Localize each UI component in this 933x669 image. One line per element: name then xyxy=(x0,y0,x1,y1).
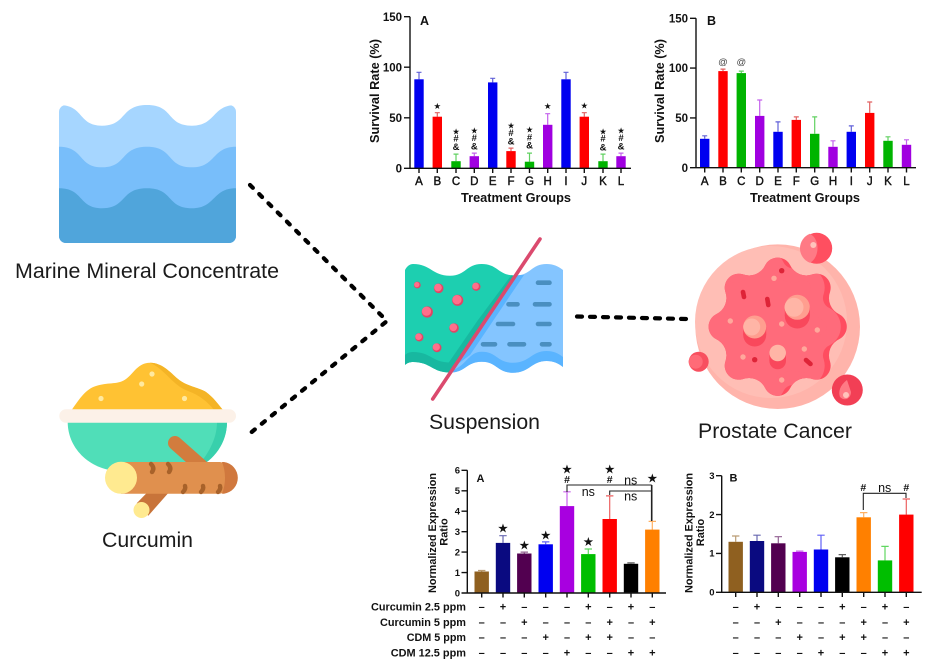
axis titles: Treatment Groups xyxy=(750,191,860,205)
significance marks xyxy=(433,102,625,154)
significance marks: # xyxy=(472,133,478,144)
icon: prostate cancer cell xyxy=(689,233,863,409)
axis title: Normalized Expression xyxy=(427,473,439,593)
significance marks: & xyxy=(453,142,460,153)
label: Suspension: Suspension xyxy=(429,411,540,434)
significance marks: @ xyxy=(718,57,728,68)
axis titles xyxy=(368,39,571,205)
significance marks: ns xyxy=(878,481,891,495)
treatment plus/minus grid: –+–––+–+– xyxy=(733,602,909,614)
chart: survival rate panel A xyxy=(368,12,631,205)
panel letter A: A xyxy=(420,14,429,28)
axis tick labels: 150 xyxy=(383,12,402,24)
significance marks: ★ xyxy=(583,534,594,549)
significance marks: ★ xyxy=(433,102,441,112)
treatment plus/minus grid: –+–––+–+– xyxy=(479,602,655,614)
significance marks xyxy=(860,481,909,495)
treatment plus/minus grid: –––+–++–– xyxy=(733,632,909,644)
bars xyxy=(414,72,626,168)
chart: expression panel A xyxy=(371,462,666,660)
axes xyxy=(690,18,916,172)
axis title xyxy=(684,473,707,593)
panel letter A: A xyxy=(476,473,484,485)
significance marks: # xyxy=(903,482,909,494)
significance marks xyxy=(497,462,658,552)
axis title: Ratio xyxy=(438,518,450,546)
significance marks: & xyxy=(526,141,533,152)
axis tick labels: 0 xyxy=(682,163,688,175)
significance marks: # xyxy=(527,132,533,143)
significance brackets xyxy=(567,485,652,495)
significance marks: ns xyxy=(624,490,637,504)
axis tick labels: 3 xyxy=(709,471,714,482)
icon: curcumin bowl and root xyxy=(59,363,238,518)
icon: sea water waves xyxy=(59,105,236,243)
label: Curcumin: Curcumin xyxy=(102,529,193,552)
axis tick labels: 50 xyxy=(675,113,688,125)
axis tick labels: 0 xyxy=(396,163,402,175)
axis tick labels xyxy=(709,471,715,599)
chart: expression panel B xyxy=(684,471,922,660)
axis tick labels: 100 xyxy=(669,63,688,75)
axis tick labels: 100 xyxy=(383,62,402,74)
treatment plus/minus grid: ––––+––++ xyxy=(479,648,656,660)
significance marks: ★ xyxy=(470,126,478,136)
bars xyxy=(474,492,660,593)
icon: suspension split panel xyxy=(395,239,570,399)
treatment row labels: CDM 12.5 ppm xyxy=(391,648,466,660)
panel letter B: B xyxy=(730,472,738,484)
axis tick labels: 1 xyxy=(455,568,461,579)
significance marks: # xyxy=(860,482,866,494)
significance marks: # xyxy=(453,134,459,145)
significance marks: ★ xyxy=(647,470,658,486)
significance marks: & xyxy=(508,136,515,147)
bars xyxy=(728,499,914,592)
significance marks: ★ xyxy=(519,538,530,552)
axis tick labels: 4 xyxy=(455,506,461,518)
significance marks: ★ xyxy=(540,528,551,542)
treatment row labels: CDM 5 ppm xyxy=(407,632,466,644)
axis tick labels: 2 xyxy=(709,510,714,521)
axis titles: Survival Rate (%) xyxy=(368,39,382,143)
treatment plus/minus grid xyxy=(479,602,656,660)
axes xyxy=(404,17,631,173)
axis tick labels: 0 xyxy=(709,588,714,599)
significance marks: & xyxy=(618,141,625,152)
axis tick labels xyxy=(383,12,625,188)
axis tick labels: ABCDEFGHIJKL xyxy=(415,176,625,188)
treatment row labels: Curcumin 2.5 ppm xyxy=(371,602,466,614)
label: Marine Mineral Concentrate: Marine Mineral Concentrate xyxy=(15,260,279,283)
significance marks xyxy=(718,57,746,68)
axis titles: Treatment Groups xyxy=(461,191,571,205)
bracket drop xyxy=(651,485,653,521)
axis titles xyxy=(653,39,860,205)
axis tick labels: 2 xyxy=(455,547,460,558)
treatment plus/minus grid xyxy=(733,602,910,660)
axes xyxy=(716,476,922,597)
chart: survival rate panel B xyxy=(653,13,916,205)
axis title: Normalized Expression xyxy=(684,473,696,593)
significance marks: # xyxy=(564,474,570,486)
axis tick labels: ABCDEFGHIJKL xyxy=(701,176,910,188)
axis tick labels: 6 xyxy=(455,466,460,477)
treatment plus/minus grid: ––+–––+–+ xyxy=(733,617,910,629)
axis tick labels xyxy=(669,13,910,188)
axis tick labels: 3 xyxy=(455,527,460,538)
arrow: dashed connector from suspension to prostate cancer xyxy=(577,316,687,319)
significance marks: ★ xyxy=(561,462,573,476)
significance marks: ★ xyxy=(497,520,509,536)
significance bracket xyxy=(863,493,906,510)
significance marks: ★ xyxy=(604,462,615,476)
significance marks: ★ xyxy=(580,102,588,112)
significance marks: ★ xyxy=(526,125,534,135)
significance marks: ns xyxy=(624,474,637,488)
significance marks: ns xyxy=(582,485,595,499)
axis tick labels: 0 xyxy=(455,588,460,599)
panel letter B: B xyxy=(707,14,716,28)
axis tick labels: 1 xyxy=(709,549,715,560)
axis title: Ratio xyxy=(695,518,707,546)
treatment plus/minus grid: ––+–––+–+ xyxy=(479,617,656,629)
treatment plus/minus grid: ––––+––++ xyxy=(733,648,910,660)
significance marks: # xyxy=(618,133,624,144)
significance marks: ★ xyxy=(507,121,515,131)
significance marks: # xyxy=(607,474,613,486)
bars xyxy=(700,69,911,168)
label: Prostate Cancer: Prostate Cancer xyxy=(698,420,852,443)
significance marks: ★ xyxy=(617,126,625,136)
significance marks: ★ xyxy=(544,102,552,112)
axis titles: Survival Rate (%) xyxy=(653,39,667,143)
axes xyxy=(462,470,666,598)
treatment row labels xyxy=(371,602,466,660)
treatment row labels: Curcumin 5 ppm xyxy=(380,617,466,629)
axis title xyxy=(427,473,450,593)
arrow: dashed connector from ingredients to suspension xyxy=(250,185,387,432)
axis tick labels: 5 xyxy=(455,486,461,497)
significance marks: ★ xyxy=(452,127,460,137)
axis tick labels: 50 xyxy=(389,113,402,125)
significance marks: & xyxy=(600,143,607,154)
axis tick labels xyxy=(455,466,461,599)
significance marks: & xyxy=(471,141,478,152)
significance marks: ★ xyxy=(599,127,607,137)
axis tick labels: 150 xyxy=(669,13,688,25)
significance marks: # xyxy=(508,128,514,139)
significance marks: @ xyxy=(736,57,746,68)
significance marks: # xyxy=(600,134,606,145)
treatment plus/minus grid: –––+–++–– xyxy=(479,632,655,644)
